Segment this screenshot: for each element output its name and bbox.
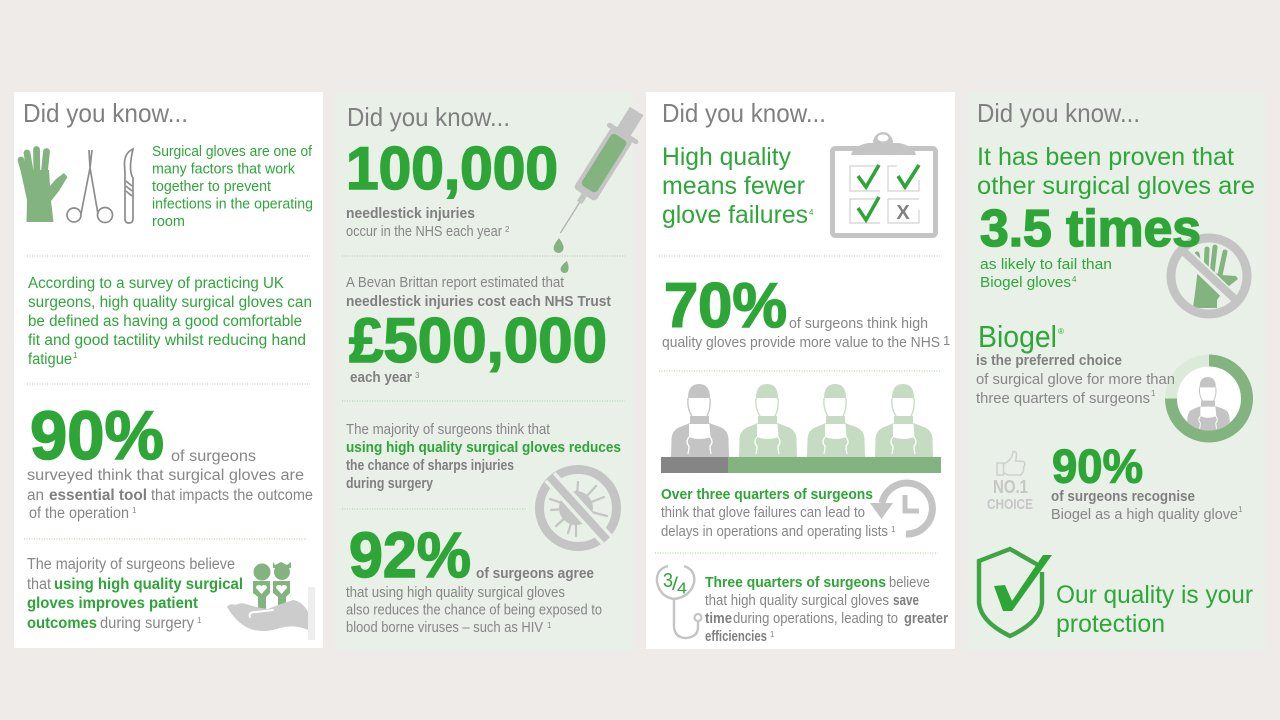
text: survey definition: be defined as having a good comfortable	[28, 313, 302, 330]
text: each year: each year	[350, 370, 412, 386]
panel: Biogel preference	[976, 103, 1254, 638]
text: patient outcomes: that	[27, 576, 52, 593]
text: factors: infections in the operating	[152, 196, 313, 212]
text: saving time	[705, 575, 948, 645]
text: 92 percent description: 1	[547, 621, 552, 630]
text: 70 percent description: quality gloves provide more value to the NHS	[662, 335, 940, 351]
text: recognise: 1	[1238, 505, 1243, 514]
text: saving time: greater	[904, 611, 948, 627]
text: survey definition	[28, 275, 312, 368]
text: saving time: 1	[770, 630, 775, 639]
icon: no hand	[1171, 238, 1247, 314]
text: survey definition: According to a survey of practicing UK	[28, 275, 285, 292]
text: fewer glove failures: means fewer	[662, 172, 805, 200]
text: needlestick injuries	[346, 206, 510, 240]
text: factors: many factors that work	[152, 162, 296, 178]
icon: stethoscope with three quarters: 4	[677, 580, 687, 598]
text: 92 percent description: that using high quality surgical gloves	[346, 585, 565, 601]
icon: surgeon green 3	[875, 384, 933, 457]
text: preferred choice	[976, 353, 1175, 407]
text: sharps injuries: the chance of sharps injuries	[346, 458, 514, 474]
text: saving time: during operations, leading to	[733, 611, 898, 627]
panel: glove failures	[646, 92, 955, 649]
text: 70 percent description	[662, 316, 950, 351]
text: sharps injuries	[346, 422, 621, 492]
text: 90 percent description: 1	[132, 506, 137, 515]
text: 70 percent description: of surgeons think high	[789, 316, 928, 332]
text: sharps injuries: using high quality surgical gloves reduces	[346, 440, 621, 456]
text: likely to fail	[980, 257, 1112, 291]
icon: no virus	[540, 470, 616, 546]
text: 90 percent description: an	[27, 487, 44, 504]
text: 92 percent description: blood borne viruses – such as HIV	[346, 620, 543, 636]
icon: stethoscope with three quarters: 3	[663, 570, 673, 592]
icon: glove	[20, 150, 68, 222]
text: 70 percent description: 1	[943, 333, 950, 348]
text: delays: Over three quarters of surgeons	[661, 487, 873, 503]
heading: did you know: Did you know...	[977, 98, 1140, 128]
text: 90 percent description	[27, 448, 313, 522]
chart: surgeons pictogram	[661, 384, 941, 473]
text: saving time: that high quality surgical gloves	[705, 593, 889, 609]
text: likely to fail: 4	[1072, 275, 1077, 284]
text: saving time: time	[705, 611, 732, 627]
text: preferred choice: 1	[1151, 389, 1156, 398]
stat: 90 percent: 90%	[1052, 440, 1143, 492]
text: patient outcomes: outcomes	[27, 615, 97, 632]
text: patient outcomes: 1	[197, 616, 202, 625]
text: survey definition: surgeons, high quality surgical gloves can	[28, 294, 312, 311]
icon: clock with arrow	[870, 483, 932, 534]
text: factors: together to prevent	[152, 179, 271, 195]
icon: stethoscope with three quarters: /	[672, 574, 678, 594]
text: 90 percent description: surveyed think that surgical gloves are	[27, 467, 304, 484]
text: factors	[152, 144, 313, 230]
icon: forceps	[67, 150, 112, 222]
text: 90 percent description: that impacts the outcome	[151, 487, 313, 504]
text: fewer glove failures	[662, 143, 814, 229]
text: our quality	[1056, 581, 1253, 638]
stat: 92 percent: 92%	[349, 519, 471, 591]
text: survey definition: fit and good tactility whilst reducing hand	[28, 332, 306, 349]
icon: syringe	[545, 101, 652, 273]
chart: donut three quarters	[1171, 360, 1247, 436]
panel: surgical gloves factors	[14, 92, 323, 648]
text: needlestick injuries: occur in the NHS each year	[346, 224, 502, 240]
text: preferred choice: is the preferred choice	[976, 353, 1122, 369]
text: 92 percent description	[346, 566, 602, 636]
text: delays: think that glove failures can lead to	[661, 505, 865, 521]
icon: clipboard checklist	[832, 132, 936, 236]
text: 92 percent description: of surgeons agree	[476, 566, 594, 582]
text: delays: 1	[891, 525, 896, 534]
text: needlestick injuries: needlestick injuries	[346, 206, 475, 222]
text: sharps injuries: The majority of surgeons think that	[346, 422, 550, 438]
logo: Biogel: ®	[1058, 327, 1064, 336]
text: proven claim: other surgical gloves are	[977, 172, 1255, 200]
text: fewer glove failures: High quality	[662, 143, 791, 171]
text: 90 percent description: essential tool	[49, 487, 147, 504]
text: survey definition: fatigue	[28, 351, 72, 368]
text: needlestick injuries: 2	[505, 225, 510, 234]
text: saving time: believe	[889, 575, 930, 591]
stat: 70 percent: 70%	[664, 271, 787, 341]
text: factors: room	[152, 214, 185, 230]
panel: needlestick injuries	[335, 92, 652, 651]
stat: 90 percent: 90%	[30, 397, 164, 474]
text: fewer glove failures: glove failures	[662, 201, 808, 229]
icon: surgeon grey	[671, 384, 729, 457]
icon: clipboard checklist: X	[896, 202, 910, 224]
heading: did you know: Did you know...	[347, 102, 510, 132]
text: saving time: save	[893, 593, 919, 609]
text: patient outcomes	[27, 556, 243, 632]
icon: hand holding children	[227, 562, 315, 640]
text: factors: Surgical gloves are one of	[152, 144, 313, 160]
text: preferred choice: three quarters of surgeons	[976, 391, 1150, 407]
text: proven claim	[977, 143, 1255, 200]
text: recognise	[1051, 489, 1243, 523]
text: 92 percent description: also reduces the chance of being exposed to	[346, 602, 602, 618]
text: sharps injuries: during surgery	[346, 476, 433, 492]
icon: scalpel	[124, 149, 133, 223]
heading: did you know: Did you know...	[23, 98, 188, 128]
text: delays: delays in operations and operating lists	[661, 524, 888, 540]
text: delays	[661, 487, 896, 540]
text: proven claim: It has been proven that	[977, 143, 1234, 171]
text: saving time: Three quarters of surgeons	[705, 575, 886, 591]
text: our quality: Our quality is your	[1056, 581, 1253, 609]
text: preferred choice: of surgical glove for more than	[976, 372, 1175, 388]
text: survey definition: 1	[73, 351, 78, 360]
bar: one quarter versus three quarters	[661, 457, 941, 473]
icon: surgeon green 1	[739, 384, 797, 457]
text: Bevan Brittan report	[346, 275, 611, 310]
text: likely to fail: Biogel gloves	[980, 275, 1071, 291]
text: our quality: protection	[1056, 610, 1165, 638]
heading: did you know: Did you know...	[662, 98, 826, 128]
stat: 100,000: 100,000	[346, 135, 558, 202]
text: recognise: of surgeons recognise	[1051, 489, 1195, 505]
text: recognise: Biogel as a high quality glove	[1051, 507, 1238, 523]
icon: surgeon green 2	[807, 384, 865, 457]
text: patient outcomes: during surgery	[100, 615, 194, 632]
stat: 500,000 pounds: £500,000	[349, 306, 607, 376]
icon: shield with check	[979, 549, 1052, 636]
text: Bevan Brittan report: needlestick injuries cost each NHS Trust	[346, 294, 611, 310]
text: patient outcomes: The majority of surgeons believe	[27, 556, 235, 573]
icon: thumbs up number one choice: CHOICE	[987, 497, 1033, 513]
text: 90 percent description: of the operation	[29, 505, 129, 522]
text: 90 percent description: of surgeons	[171, 448, 256, 465]
icon: thumbs up number one choice: NO.1	[993, 477, 1028, 497]
stat: 3.5 times: 3.5 times	[980, 200, 1201, 258]
text: fewer glove failures: 4	[809, 208, 814, 217]
text: Bevan Brittan report: A Bevan Brittan report estimated that	[346, 275, 564, 291]
icon: thumbs up number one choice	[987, 451, 1033, 513]
text: each year: 3	[415, 371, 420, 380]
text: patient outcomes: using high quality surgical	[54, 576, 243, 593]
text: likely to fail: as likely to fail than	[980, 257, 1112, 273]
text: saving time: efficiencies	[705, 629, 767, 645]
text: patient outcomes: gloves improves patient	[27, 595, 198, 612]
logo: Biogel: Biogel	[978, 319, 1057, 354]
icon: stethoscope with three quarters	[657, 566, 702, 638]
